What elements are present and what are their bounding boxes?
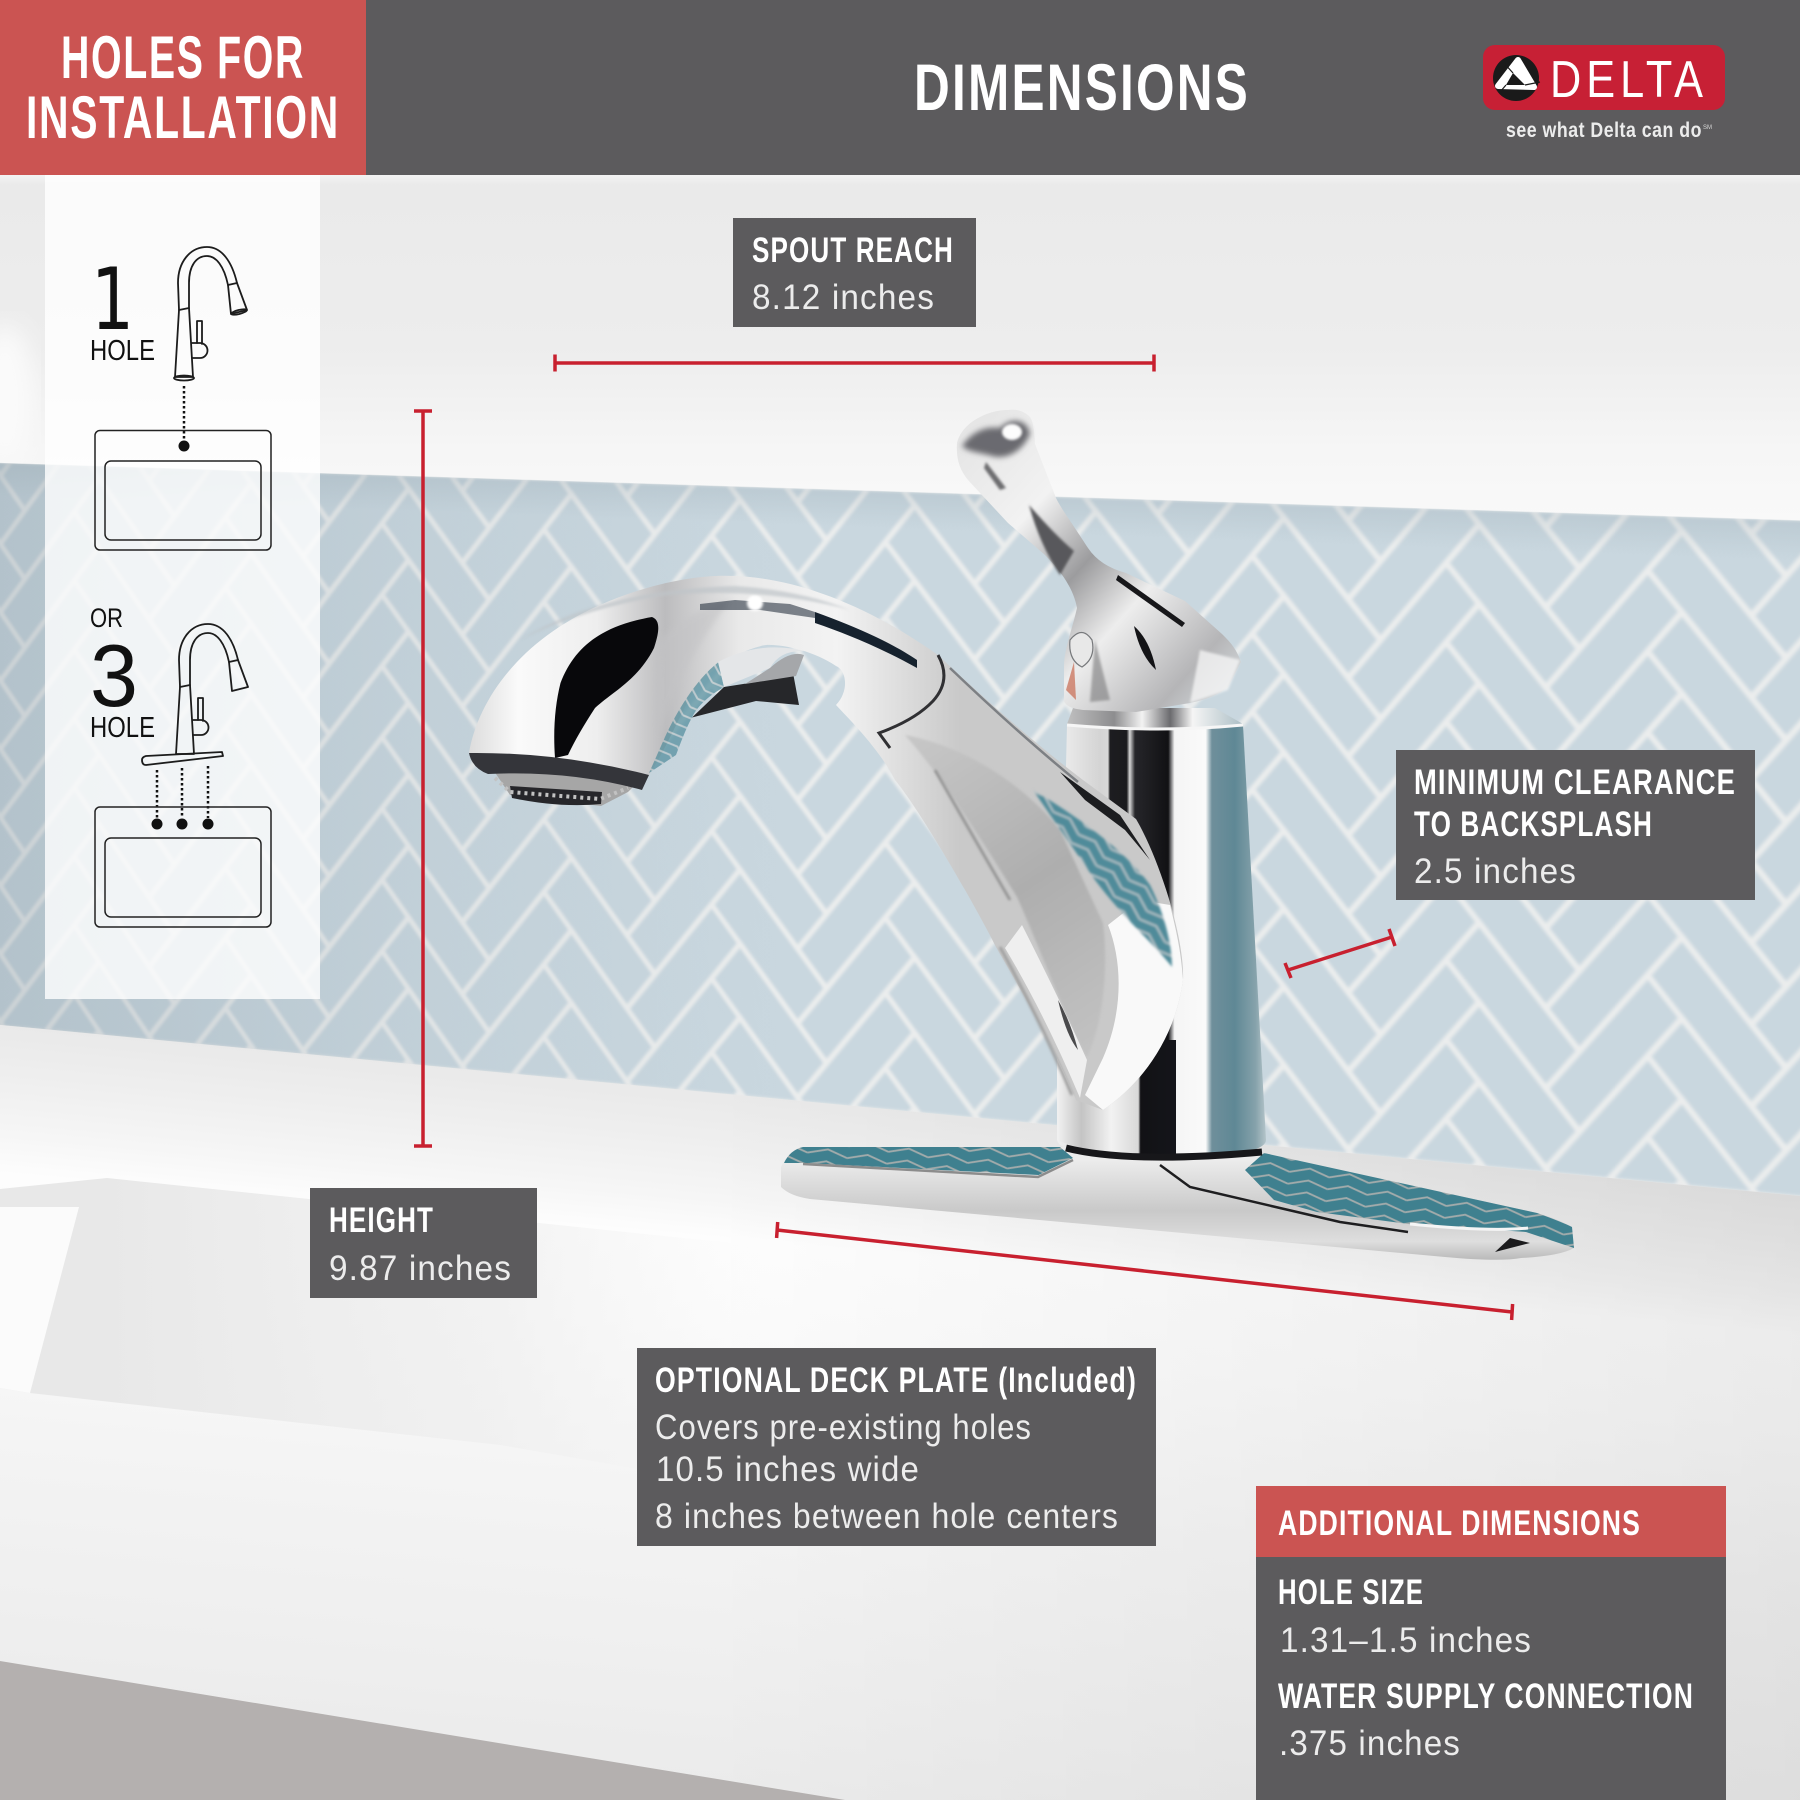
counter top <box>0 1025 1800 1800</box>
icon: three dotted connectors <box>157 766 208 818</box>
lower-left white strip <box>1005 925 1087 1098</box>
callout: minimum clearance: 2.5 inches <box>1414 852 1577 891</box>
spout and pull-out head <box>469 576 1183 1110</box>
heading: holes for installation <box>0 0 366 175</box>
background: herringbone tile backsplash <box>0 462 1800 1196</box>
three-hole option: HOLE <box>90 712 155 744</box>
logo: delta <box>1483 45 1725 142</box>
collar ring <box>1067 708 1243 728</box>
callout: spout reach: SPOUT REACH <box>752 231 954 270</box>
callout: height: 9.87 inches <box>329 1249 512 1288</box>
panel: holes for installation <box>45 175 320 999</box>
callout: optional deck plate: 8 inches between hole centers <box>655 1497 1119 1536</box>
arrow: spout reach line <box>555 354 1154 372</box>
hole size <box>1278 1573 1532 1660</box>
logo: delta: see what Delta can do <box>1506 119 1702 142</box>
arrow: clearance line <box>1285 929 1395 978</box>
hole size: HOLE SIZE <box>1278 1573 1424 1612</box>
floor <box>0 1661 845 1800</box>
callout: spout reach <box>733 218 976 327</box>
head black reflection <box>554 617 658 758</box>
column <box>1057 708 1266 1160</box>
spout gray reflection <box>905 735 1105 1057</box>
dark underside <box>692 676 799 718</box>
arrow: deck plate line <box>777 1222 1513 1320</box>
water supply connection <box>1278 1677 1694 1763</box>
one-hole option: 1 <box>91 250 134 350</box>
inner arch reflection <box>649 662 724 773</box>
callout: optional deck plate: OPTIONAL DECK PLATE (Included) <box>655 1361 1137 1400</box>
heading: additional dimensions: ADDITIONAL DIMENSIONS <box>1278 1504 1641 1543</box>
icon: sink <box>95 807 271 927</box>
one-hole option: HOLE <box>90 335 155 367</box>
callout: optional deck plate <box>637 1348 1156 1546</box>
heading: additional dimensions <box>1256 1486 1726 1557</box>
logo: delta: DELTA <box>1550 51 1708 109</box>
head side shade <box>658 600 730 735</box>
callout: spout reach: 8.12 inches <box>752 278 935 317</box>
heading: holes for installation: INSTALLATION <box>26 84 340 151</box>
one-hole option <box>90 247 271 550</box>
callout: minimum clearance <box>1396 750 1755 900</box>
icon: faucet one-hole <box>174 247 247 380</box>
teal tile reflection <box>1033 790 1172 967</box>
callout: optional deck plate: Covers pre-existing holes <box>655 1408 1032 1447</box>
deck plate <box>781 1147 1574 1260</box>
logo: delta: SM <box>1703 125 1712 131</box>
water supply connection: .375 inches <box>1279 1724 1461 1763</box>
heading: holes for installation: HOLES FOR <box>61 24 305 91</box>
callout: minimum clearance: TO BACKSPLASH <box>1414 805 1653 844</box>
handle <box>957 410 1241 712</box>
sink basin <box>0 1178 760 1490</box>
header bar <box>0 0 1800 175</box>
three-hole option: OR <box>90 603 123 633</box>
callout: height <box>310 1188 537 1298</box>
icon: sink <box>95 430 271 550</box>
faucet photo illustration <box>469 410 1574 1260</box>
bright rim highlight <box>1085 900 1183 1110</box>
upper glossy strip <box>815 612 917 668</box>
callout: optional deck plate: 10.5 inches wide <box>656 1450 920 1489</box>
three-hole option: 3 <box>90 626 138 725</box>
arrow: height line <box>414 411 432 1146</box>
callout: height: HEIGHT <box>329 1201 434 1240</box>
dark tear reflection <box>1058 1000 1078 1050</box>
icon: three hole dots <box>152 818 214 830</box>
title: dimensions: DIMENSIONS <box>914 50 1250 124</box>
nozzle face <box>469 753 649 806</box>
hole size: 1.31–1.5 inches <box>1280 1621 1532 1660</box>
seam ring <box>879 655 944 748</box>
panel: additional dimensions <box>1256 1486 1726 1800</box>
three-hole option <box>90 603 271 927</box>
icon: hole dot <box>178 440 190 452</box>
upper edge lines <box>950 668 1078 782</box>
icon: dotted connector <box>183 386 185 440</box>
icon: faucet three-hole <box>142 624 248 765</box>
